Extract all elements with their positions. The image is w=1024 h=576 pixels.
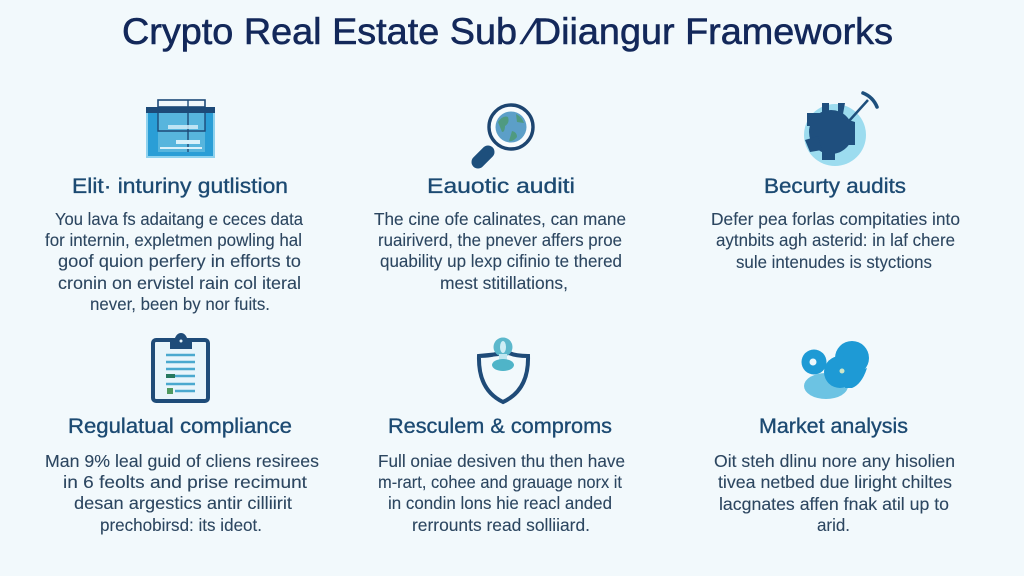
text block: Defer pea forlas compitaties into: [711, 209, 960, 229]
text block: Man 9% leal guid of cliens resirees: [45, 451, 319, 471]
icon: clipboard: [153, 333, 208, 401]
text block: [45, 451, 319, 535]
text block: for internin, expletmen powling hal: [45, 230, 302, 250]
text block: never, been by nor fuits.: [90, 294, 270, 314]
text block: The cine ofe calinates, can mane: [374, 209, 626, 229]
panel: data gathering: [45, 100, 303, 314]
text block: [711, 209, 960, 272]
text block: desan argestics antir cilliirit: [74, 493, 292, 513]
heading: Market analysis: [759, 414, 908, 438]
panel: regulatory compliance: [45, 333, 319, 535]
heading: Becurty audits: [764, 174, 906, 198]
text block: [378, 451, 625, 535]
icon: gear cluster: [802, 341, 869, 399]
icon: document tray: [146, 100, 215, 157]
text block: lacgnates affen fnak atil up to: [719, 494, 949, 514]
text block: in condin lons hie reacl anded: [388, 493, 612, 513]
text block: [714, 451, 955, 535]
text block: cronin on ervistel rain col iteral: [58, 273, 301, 293]
heading: Regulatual compliance: [68, 414, 292, 438]
text block: in 6 feolts and prise recimunt: [63, 472, 307, 492]
heading: Resculem & comproms: [388, 414, 612, 438]
text block: tivea netbed due liright chiltes: [718, 472, 952, 492]
text block: m-rart, cohee and grauage norx it: [378, 472, 622, 492]
title: Crypto Real Estate Sub ⁄Diiangur Frameworks: [122, 11, 893, 52]
text block: ruairiverd, the pnever affers proe: [378, 230, 622, 250]
text block: goof quion perfery in efforts to: [58, 251, 301, 271]
heading: Eauotic auditi: [427, 174, 575, 198]
icon: gear with hammer: [804, 93, 877, 166]
text block: prechobirsd: its ideot.: [100, 515, 262, 535]
panel: security audits: [711, 93, 960, 272]
text block: Oit steh dlinu nore any hisolien: [714, 451, 955, 471]
icon: magnifying glass with globe: [478, 105, 533, 162]
panel: market analysis: [714, 341, 955, 535]
text block: [45, 209, 303, 314]
text block: Full oniae desiven thu then have: [378, 451, 625, 471]
text block: quability up lexp cifinio te thered: [380, 251, 622, 271]
panel: rescue and compromise: [378, 338, 625, 535]
text block: [374, 209, 626, 293]
text block: rerrounts read solliiard.: [412, 515, 590, 535]
text block: aytnbits agh asterid: in laf chere: [716, 230, 955, 250]
panel: economic audit: [374, 105, 626, 293]
text block: arid.: [817, 515, 850, 535]
heading: Elit· inturiny gutlistion: [72, 174, 288, 198]
icon: shield with lock: [479, 338, 528, 402]
text block: mest stitillations,: [440, 273, 568, 293]
text block: sule intenudes is styctions: [736, 252, 932, 272]
text block: You lava fs adaitang e ceces data: [55, 209, 303, 229]
